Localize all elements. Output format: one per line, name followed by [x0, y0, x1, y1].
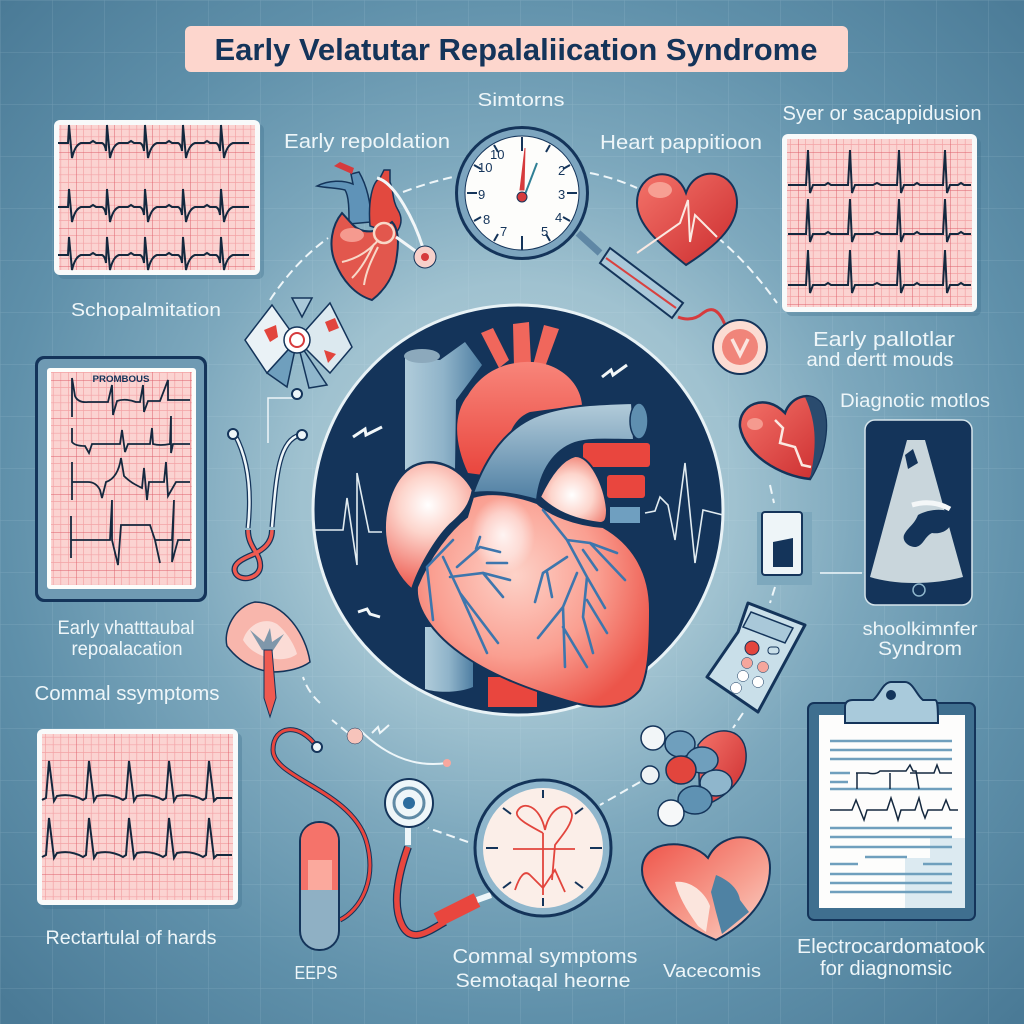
label: shockmitter: shoolkimnfer [862, 619, 978, 639]
highlight [471, 497, 535, 573]
label: semotaqal heorne: Semotaqal heorne [456, 971, 630, 992]
label: and dert mouds: and dertt mouds [806, 350, 954, 371]
label: for diagnomsic: for diagnomsic [820, 958, 952, 980]
spark marks [353, 365, 627, 617]
clock numerals: 10 [490, 147, 504, 162]
icon: calculator device [707, 603, 805, 712]
pulmonary branches [583, 443, 650, 523]
clock numerals: 10 [478, 160, 492, 175]
clock numerals: 5 [541, 224, 548, 239]
title banner: Early Velatutar Repalaliication Syndrome [214, 32, 818, 67]
label: diagnostic methods: Diagnotic motlos [840, 391, 990, 412]
dashed connection ring [270, 173, 777, 842]
clock numerals: 3 [558, 187, 565, 202]
aorta vessels [481, 322, 559, 368]
label: common symptoms: Commal ssymptoms [34, 683, 220, 705]
label: electrocardiomatook: Electrocardomatook [797, 936, 986, 958]
label: heart palpitation: Heart pappitioon [600, 132, 762, 154]
label: top right: Syer or sacappidusion [782, 103, 982, 125]
icon: pills and heart [641, 726, 746, 826]
clock numerals: 9 [478, 187, 485, 202]
icon: pill capsule [300, 822, 339, 950]
label: EEPS: EEPS [294, 963, 338, 983]
central heart [385, 322, 650, 707]
stethoscope bottom [385, 779, 491, 935]
label: repolarisation: repoalacation [72, 639, 182, 660]
icon: gauge clock [455, 126, 767, 374]
icon: valve disc [245, 298, 352, 388]
right atrium [540, 456, 607, 523]
label: syndrom: Syndrom [878, 639, 962, 660]
vena cava [404, 342, 537, 707]
panel: phone ultrasound [865, 420, 972, 605]
clock numerals: 8 [483, 212, 490, 227]
clock numerals: 4 [555, 210, 562, 225]
central dark circle [313, 305, 723, 715]
icon: broken heart right [740, 396, 826, 479]
title banner [185, 26, 848, 72]
icon: valve cross section [226, 602, 310, 717]
coronary vessels [427, 510, 625, 667]
icon: magnifier [475, 780, 611, 916]
clock numerals: 7 [500, 224, 507, 239]
stethoscope left [228, 389, 307, 578]
label: early ventricular: Early vhatttaubal [58, 618, 194, 639]
tablet heading: PROMBOUS [92, 374, 150, 384]
pulmonary artery [473, 403, 648, 500]
clock numerals [478, 147, 565, 239]
label: early repolarisation: Early repoldation [284, 131, 450, 153]
label: rectartial of hards: Rectartulal of hards [46, 928, 216, 949]
stethoscope bottom left [273, 725, 451, 920]
label: simtorns: Simtorns [478, 90, 564, 110]
label: common symptoms bottom: Commal symptoms [452, 946, 638, 968]
icon: red heart top right [637, 174, 737, 265]
panel: ECG bottom left [37, 729, 242, 909]
panel: ECG top left [54, 120, 264, 279]
label: schopalmitation: Schopalmitation [71, 300, 221, 320]
clock numerals: 2 [558, 163, 565, 178]
heart body [417, 494, 650, 707]
panel: ECG tablet left [35, 356, 207, 602]
aortic arch [457, 362, 582, 475]
left atrium [385, 462, 473, 590]
icon: anatomical heart top [317, 162, 436, 300]
icon: broken heart bottom [642, 837, 770, 940]
ECG trace inside circle [313, 463, 723, 565]
label: early palliatar: Early pallotlar [813, 329, 955, 351]
icon: vial [757, 512, 862, 585]
panel: clipboard [808, 682, 975, 920]
panel: ECG top right [782, 134, 981, 316]
label: vacecomis: Vacecomis [663, 961, 761, 981]
